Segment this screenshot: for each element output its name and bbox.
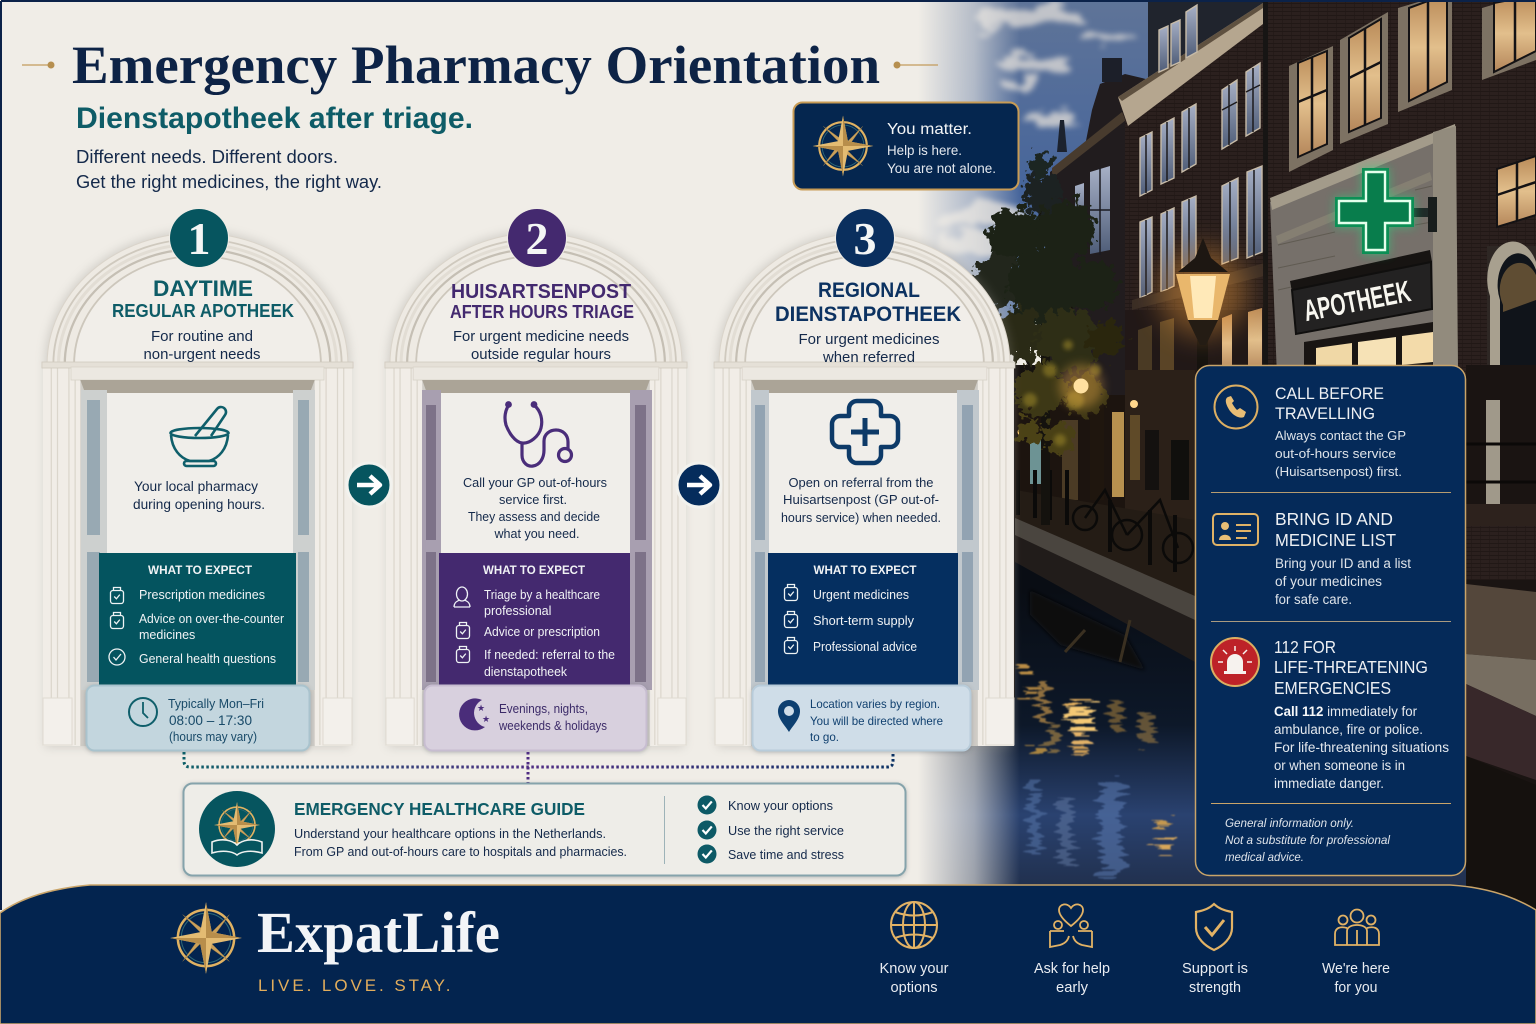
door 3 side doors [751, 390, 979, 690]
advice: 112 emergencies: or when someone is in [1274, 758, 1405, 773]
panel: practical advice [1196, 366, 1466, 876]
logo: wordmark: ExpatLife [257, 900, 500, 965]
door 3 what to expect [768, 553, 958, 686]
door 1 subheading: non-urgent needs [144, 346, 260, 363]
footer band [0, 885, 1536, 1024]
advice: call before travelling: TRAVELLING [1275, 404, 1375, 423]
value: support is strength: Support is [1182, 960, 1248, 977]
advice: call before travelling: out-of-hours service [1275, 446, 1396, 461]
logo: compass [170, 902, 242, 974]
illuminated green cross [1335, 168, 1437, 254]
intro text: Different needs. Different doors. [76, 147, 338, 167]
intro text: Get the right medicines, the right way. [76, 172, 382, 192]
guide text: Understand your healthcare options in the Netherlands. [294, 826, 606, 841]
panel: door 1 daytime [42, 208, 353, 750]
far building [1050, 58, 1150, 530]
door 1 description: during opening hours. [133, 496, 265, 512]
subtitle: Dienstapotheek after triage. [76, 102, 473, 135]
door 2 arch [385, 231, 687, 747]
value: support is strength [1182, 904, 1248, 996]
guide checklist: Know your options [728, 798, 833, 813]
door 1 subheading [144, 328, 260, 363]
advice: bring id: for safe care. [1275, 592, 1352, 607]
value: ask for help early [1034, 904, 1110, 996]
door 1 what to expect: Advice on over-the-counter [139, 612, 284, 626]
sky with clouds [900, 0, 1200, 320]
value: know your options [880, 902, 948, 996]
door 3 description [781, 475, 941, 525]
guide checklist: Save time and stress [728, 847, 844, 862]
advice: call before travelling: CALL BEFORE [1275, 384, 1384, 403]
street level shops and quay [1015, 370, 1195, 662]
door 3 what to expect: WHAT TO EXPECT [814, 563, 917, 577]
panel: emergency healthcare guide [184, 784, 906, 876]
door 1 description: Your local pharmacy [134, 478, 258, 494]
advice: 112 emergencies: 112 FOR [1274, 637, 1336, 657]
door 3 what to expect: Short-term supply [813, 614, 915, 628]
intro text [76, 147, 382, 192]
advice: 112 emergencies: Call 112 immediately for [1274, 704, 1417, 719]
pharmacy storefront windows [1304, 322, 1433, 376]
door 1 arch [42, 231, 353, 747]
step number 3: 3 [854, 213, 876, 264]
door 2 description: what you need. [494, 526, 580, 541]
door 2 description [463, 475, 607, 541]
door 1 subheading: For routine and [151, 328, 253, 345]
door 3 description: Open on referral from the [788, 475, 934, 490]
door 2 subheading: outside regular hours [471, 347, 611, 363]
value: support is strength: strength [1189, 979, 1241, 996]
door 2 heading: AFTER HOURS TRIAGE [450, 302, 634, 322]
guide text [294, 826, 627, 859]
value: know your options: options [890, 979, 938, 996]
door 1 what to expect: General health questions [139, 652, 276, 666]
door 3 what to expect: Professional advice [813, 640, 917, 654]
door 2 what to expect: Advice or prescription [484, 625, 600, 639]
advice: 112 emergencies: ambulance, fire or police. [1274, 722, 1423, 737]
value: we are here for you: for you [1334, 979, 1378, 996]
door 1 what to expect: WHAT TO EXPECT [148, 563, 253, 577]
door 2 subheading: For urgent medicine needs [453, 329, 629, 345]
door 3 heading: REGIONAL [818, 278, 920, 302]
door 2 what to expect: Triage by a healthcare [484, 588, 600, 602]
advice: 112 emergencies: For life-threatening situations [1274, 740, 1449, 755]
disclaimer [1225, 816, 1390, 864]
door 3 opening hours: to go. [810, 730, 839, 744]
door 2 heading [450, 280, 634, 322]
value: we are here for you [1322, 910, 1390, 996]
door 3 heading: DIENSTAPOTHEEK [775, 302, 961, 326]
icon: compass book [199, 791, 275, 867]
door 3 panel [769, 393, 957, 555]
value: know your options: Know your [880, 960, 948, 977]
lantern [1159, 238, 1247, 400]
door 2 subheading [453, 329, 629, 363]
step number 2: 2 [526, 213, 548, 264]
door 1 what to expect: Prescription medicines [139, 588, 265, 602]
door 2 what to expect: If needed: referral to the [484, 648, 615, 662]
callout: you matter: You matter. [887, 121, 972, 138]
door 2 what to expect: professional [484, 604, 551, 618]
door 1 heading: REGULAR APOTHEEK [112, 300, 295, 321]
right quay [1466, 365, 1536, 935]
door 2 description: They assess and decide [468, 509, 600, 524]
step number 1: 1 [188, 213, 210, 264]
door 3 opening hours: Location varies by region. [810, 697, 940, 711]
advice: bring id: BRING ID AND [1275, 509, 1393, 529]
callout: you matter [794, 102, 1018, 190]
arrow: door 1 to door 2 [347, 463, 391, 507]
advice: call before travelling: (Huisartsenpost) first. [1275, 464, 1402, 479]
arrow: door 2 to door 3 [677, 463, 721, 507]
door 1 opening hours: 08:00 – 17:30 [169, 712, 252, 728]
disclaimer: medical advice. [1225, 850, 1304, 864]
door 2 opening hours [424, 686, 646, 750]
apotheek sign [1290, 250, 1432, 334]
door 3 subheading: when referred [822, 349, 915, 366]
door 2 description: service first. [499, 492, 567, 507]
door 2 description: Call your GP out-of-hours [463, 475, 607, 490]
cream paper background [0, 0, 1020, 895]
door 1 what to expect [99, 553, 296, 686]
logo: tagline: LIVE. LOVE. STAY. [258, 976, 454, 995]
advice: bring id: Bring your ID and a list [1275, 556, 1411, 571]
advice: bring id [1213, 509, 1411, 607]
door 2 what to expect [439, 553, 630, 686]
door 1 what to expect: medicines [139, 628, 195, 642]
advice: 112 emergencies: LIFE-THREATENING [1274, 657, 1428, 677]
door 1 description [133, 478, 265, 512]
door 3 subheading [798, 331, 940, 366]
guide checklist [698, 796, 844, 864]
title: Emergency Pharmacy Orientation [72, 35, 880, 95]
door 3 heading [775, 278, 961, 326]
title ornament left [22, 62, 54, 68]
step number 1 [169, 208, 229, 268]
dotted connector [184, 752, 893, 783]
advice: bring id: of your medicines [1275, 574, 1382, 589]
brick pharmacy building [1268, 0, 1536, 430]
icon: mortar and pestle [170, 407, 228, 466]
door 1 heading [112, 276, 295, 321]
middle townhouse [1118, 0, 1268, 430]
door 2 what to expect: WHAT TO EXPECT [483, 563, 586, 577]
door 1 panel [107, 393, 293, 555]
callout: you matter: Help is here. [887, 142, 962, 158]
door 3 description: Huisartsenpost (GP out-of- [783, 492, 939, 507]
door 1 side doors [81, 390, 315, 690]
icon: stethoscope [505, 403, 572, 466]
door 2 side doors [422, 390, 652, 690]
door 2 opening hours: weekends & holidays [498, 719, 607, 733]
guide text: From GP and out-of-hours care to hospitals and pharmacies. [294, 844, 627, 859]
canal water [900, 562, 1466, 900]
value: we are here for you: We're here [1322, 960, 1390, 977]
step number 3 [835, 208, 895, 268]
step number 2 [507, 208, 567, 268]
value: ask for help early: early [1056, 979, 1088, 996]
door 3 opening hours: You will be directed where [810, 714, 943, 728]
advice: 112 emergencies [1211, 637, 1449, 791]
tree [972, 153, 1123, 525]
door 2 opening hours: ★ [477, 703, 485, 713]
title ornament right [894, 62, 938, 68]
panel: door 3 regional dienstapotheek [714, 208, 1015, 750]
door 1 opening hours [86, 686, 310, 750]
apotheek sign: APOTHEEK [1301, 275, 1414, 328]
advice: call before travelling: Always contact the GP [1275, 428, 1406, 443]
door 3 what to expect: Urgent medicines [813, 588, 909, 602]
guide checklist: Use the right service [728, 823, 844, 838]
door 3 arch [714, 231, 1015, 747]
advice: 112 emergencies: immediate danger. [1274, 776, 1384, 791]
disclaimer: General information only. [1225, 816, 1354, 830]
advice: call before travelling [1214, 384, 1406, 479]
icon: medical cross [832, 401, 898, 463]
door 2 heading: HUISARTSENPOST [451, 280, 631, 303]
panel: door 2 huisartsenpost [385, 208, 687, 750]
door 1 opening hours: (hours may vary) [169, 730, 257, 744]
door 2 what to expect: dienstapotheek [484, 665, 568, 679]
door 2 opening hours: ★ [482, 714, 490, 724]
value: ask for help early: Ask for help [1034, 960, 1110, 977]
door 3 opening hours [752, 686, 970, 750]
door 1 heading: DAYTIME [153, 276, 253, 301]
door 2 opening hours: Evenings, nights, [499, 702, 588, 716]
advice: bring id: MEDICINE LIST [1275, 530, 1396, 550]
callout: you matter: You are not alone. [887, 160, 996, 176]
guide heading: EMERGENCY HEALTHCARE GUIDE [294, 799, 585, 819]
advice: 112 emergencies: EMERGENCIES [1274, 678, 1391, 698]
door 1 opening hours: Typically Mon–Fri [168, 697, 264, 711]
disclaimer: Not a substitute for professional [1225, 833, 1390, 847]
door 3 subheading: For urgent medicines [798, 331, 940, 348]
door 2 panel [441, 393, 630, 555]
door 3 description: hours service) when needed. [781, 510, 941, 525]
scene: canal street at dusk [900, 0, 1536, 935]
